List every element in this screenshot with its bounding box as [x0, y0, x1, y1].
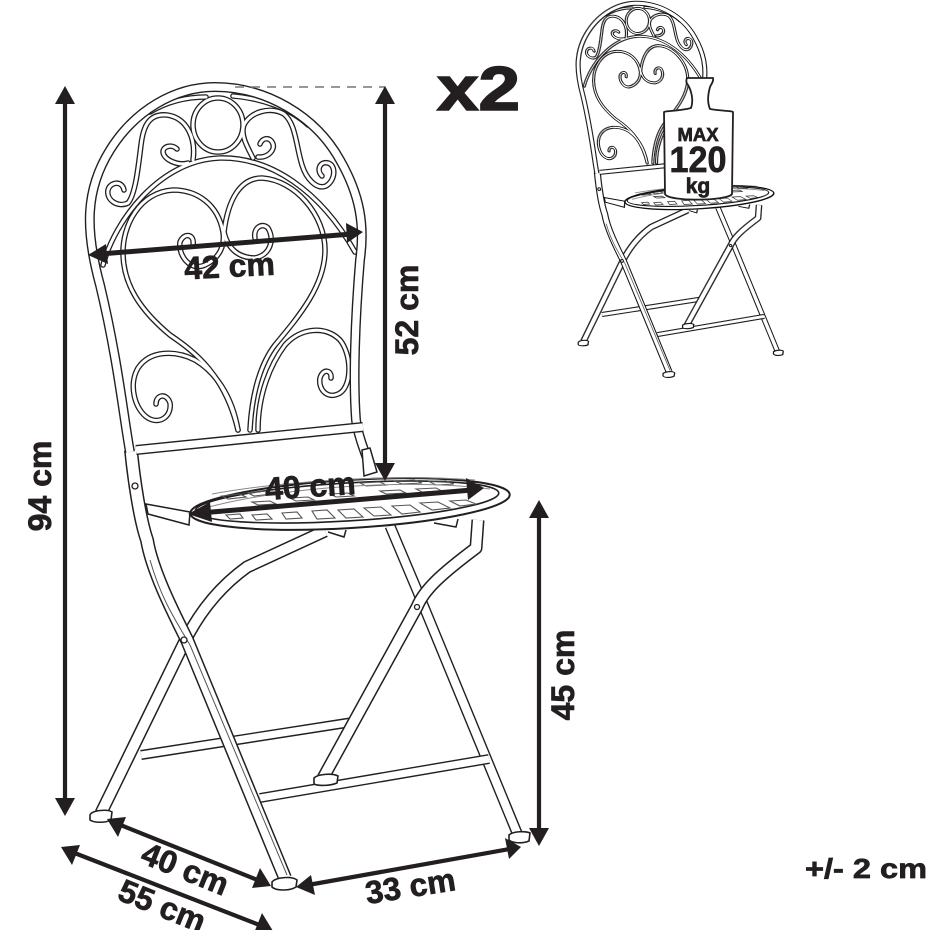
- backrest frame: [90, 87, 372, 472]
- seat lattice: [205, 478, 490, 520]
- weight label: kg: [686, 175, 710, 198]
- lower cross bar: [260, 759, 489, 798]
- weight label: 120: [670, 139, 726, 180]
- backrest ornaments: [103, 96, 355, 430]
- weight icon: [664, 78, 733, 200]
- dimension: height 94 cm: 94 cm: [22, 441, 58, 531]
- dimension: width 33 cm: [296, 838, 521, 911]
- tolerance note: +/- 2 cm: [805, 853, 927, 884]
- dimension: height 94 cm: [22, 86, 75, 816]
- dimension: seat height 45 cm: 45 cm: [545, 630, 581, 720]
- top dashed guide: [235, 86, 385, 88]
- dimension: back width 42 cm: 42 cm: [183, 246, 276, 286]
- hinge plate: [362, 448, 377, 476]
- weight label: MAX: [677, 124, 719, 145]
- dimension: back height 52 cm: 52 cm: [389, 265, 425, 355]
- rear left curved leg: [101, 531, 325, 813]
- round seat: [189, 471, 511, 537]
- dimension: seat width 40 cm: 40 cm: [264, 465, 357, 507]
- feet: [90, 774, 530, 890]
- seat support bracket: [146, 504, 190, 525]
- chair: main line drawing: [90, 87, 530, 890]
- dimension: seat height 45 cm: [529, 500, 581, 846]
- front right leg: [323, 520, 478, 778]
- upper cross bar: [141, 722, 353, 755]
- pivot rivets: [132, 483, 420, 643]
- weight label: [670, 124, 726, 198]
- backrest lower bar: [136, 427, 363, 450]
- dimension: seat depth 40 cm: 40 cm: [136, 835, 234, 902]
- back leg right: [390, 526, 517, 833]
- dimension: overall depth 55 cm: [61, 845, 273, 930]
- dimension: back height 52 cm: [375, 86, 425, 481]
- dimension: back width 42 cm: [88, 223, 363, 286]
- dimension: seat width 40 cm: [188, 465, 484, 522]
- small chair drawing: [578, 3, 784, 378]
- dimension: width 33 cm: 33 cm: [363, 861, 458, 911]
- seat brackets: [328, 519, 458, 537]
- front left leg and back post: [131, 450, 287, 878]
- multiplier x2: x2: [437, 55, 520, 124]
- dimension: seat depth 40 cm: [107, 817, 271, 902]
- small chair with max load weight: [578, 3, 784, 378]
